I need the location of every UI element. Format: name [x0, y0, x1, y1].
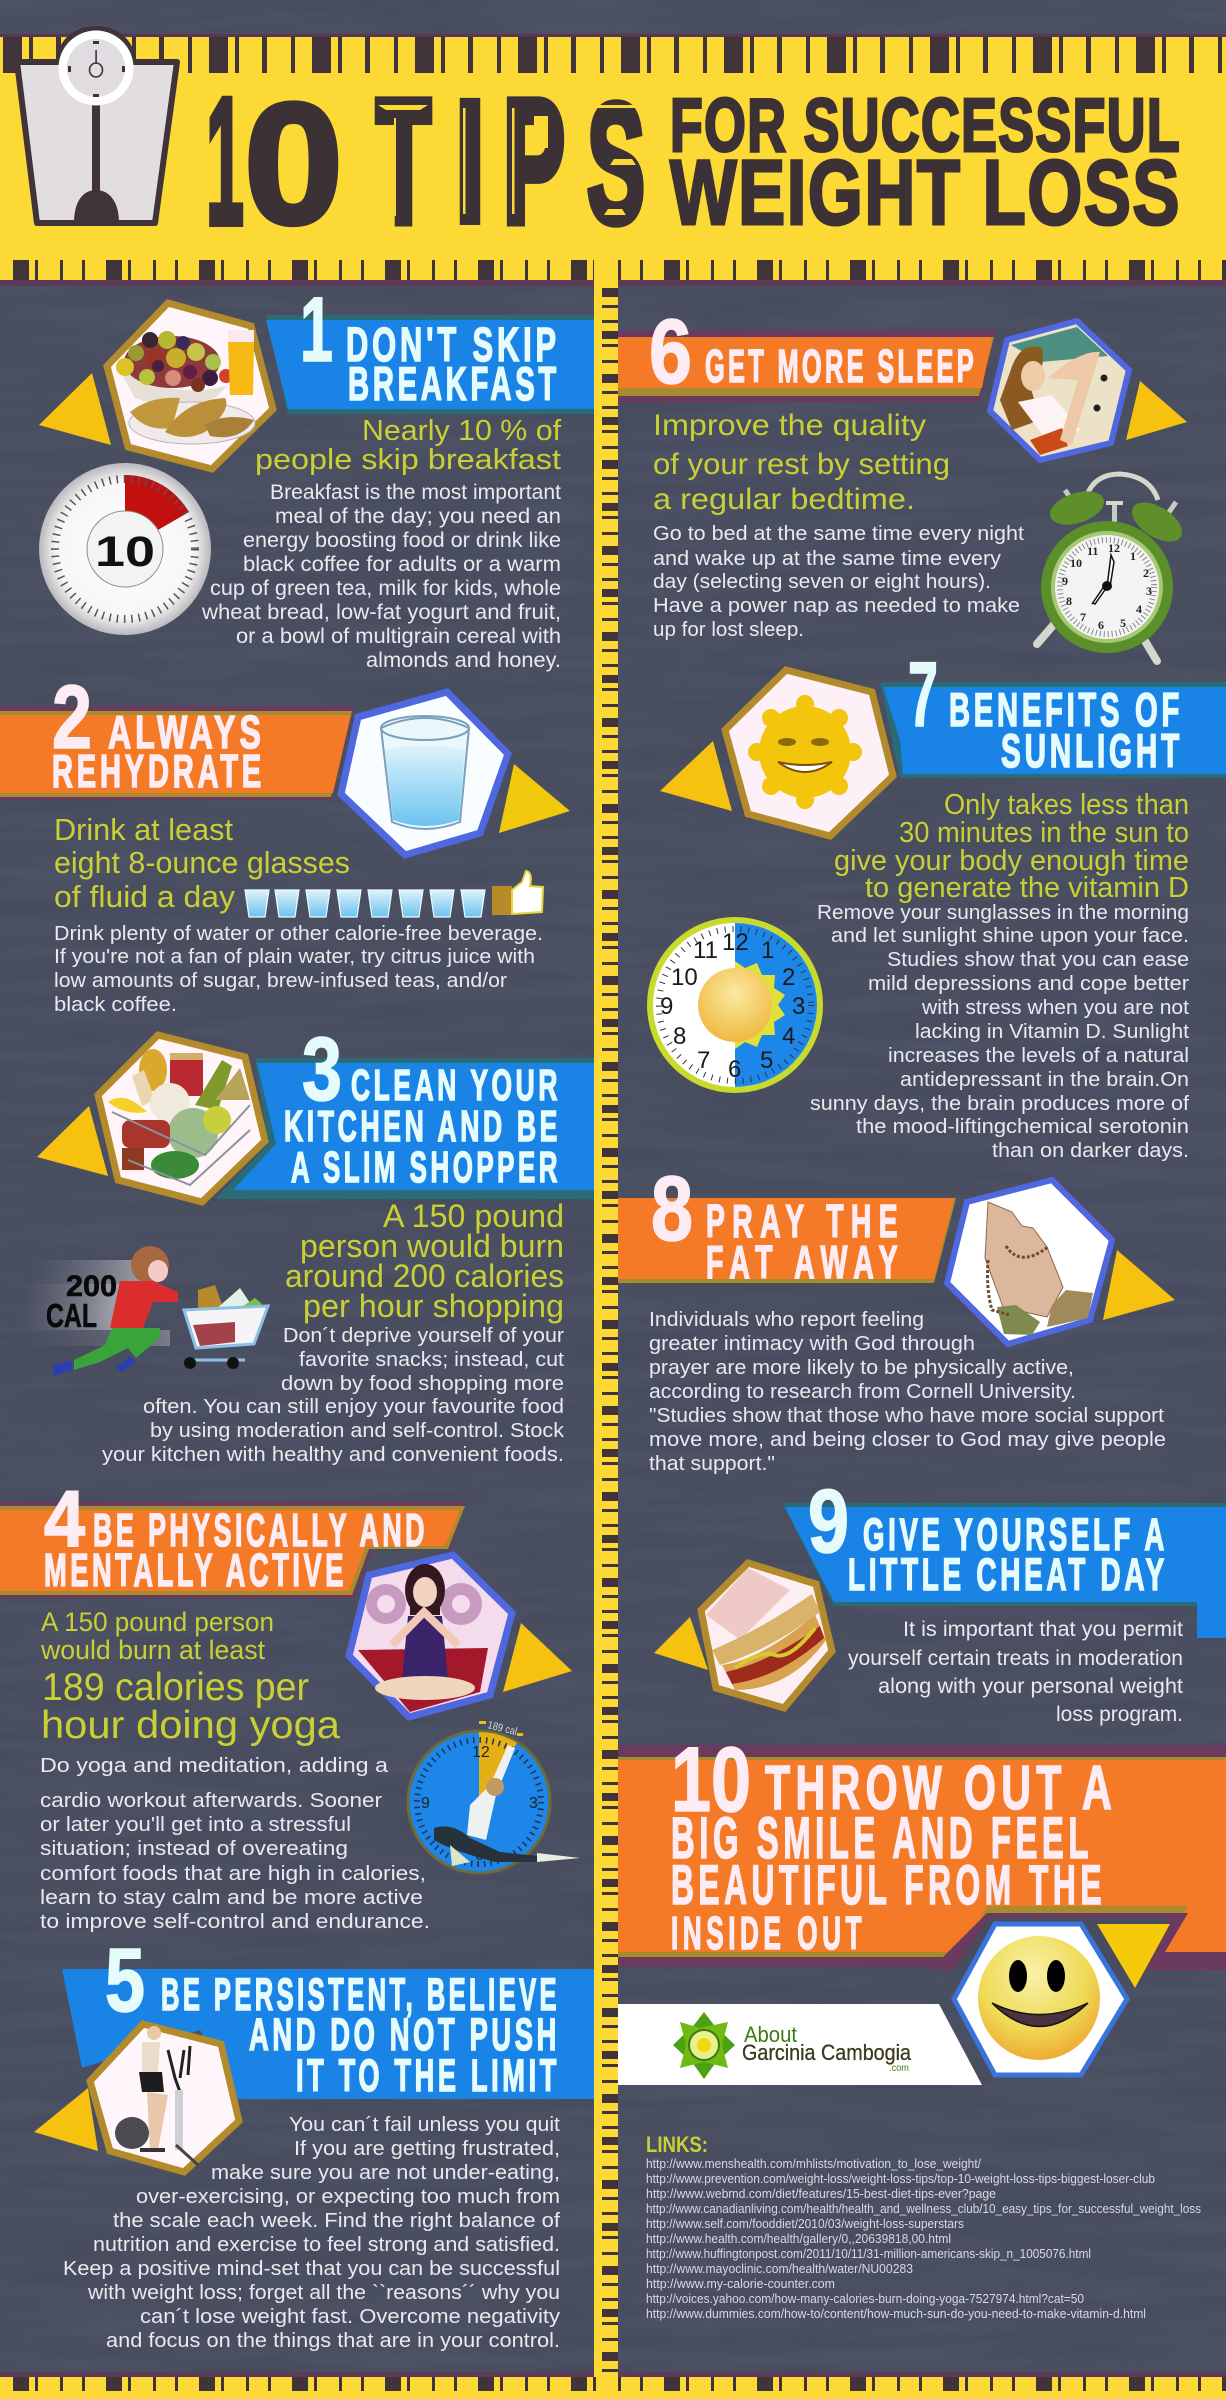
heading: AND DO NOT PUSH	[249, 2009, 560, 2060]
heading	[44, 1504, 428, 1596]
sun clock icon: 5	[760, 1047, 773, 1074]
body text: and let sunlight shine upon your face.	[831, 925, 1189, 947]
subheading: around 200 calories	[285, 1258, 564, 1294]
banner	[215, 1058, 594, 1199]
body text: Studies show that you can ease	[887, 949, 1189, 971]
yoga clock icon: 6	[475, 1847, 484, 1864]
body text: black coffee for adults or a warm	[243, 553, 561, 576]
heading: KITCHEN AND BE	[284, 1102, 561, 1151]
illustration: shopper with cart: CAL	[46, 1297, 97, 1334]
subheading: a regular bedtime.	[653, 483, 915, 516]
body text: or a bowl of multigrain cereal with	[236, 625, 561, 648]
subheading	[255, 415, 562, 476]
yoga clock icon	[408, 1719, 580, 1873]
banner	[62, 1969, 594, 2099]
banner	[618, 1198, 956, 1283]
heading	[848, 1509, 1168, 1600]
body text: along with your personal weight	[878, 1675, 1183, 1698]
body text: antidepressant in the brain.On	[900, 1069, 1189, 1091]
yoga clock icon: 9	[421, 1795, 430, 1812]
subheading: 189 calories per	[42, 1666, 309, 1709]
pointer triangle	[503, 1623, 572, 1692]
subheading: per hour shopping	[303, 1288, 564, 1324]
body text: your kitchen with healthy and convenient foods.	[102, 1444, 564, 1466]
body text: to improve self-control and endurance.	[40, 1911, 430, 1933]
heading: ALWAYS	[108, 706, 265, 758]
body text: increases the levels of a natural	[888, 1045, 1189, 1067]
footer ruler	[0, 2372, 1226, 2399]
link urls: http://www.self.com/fooddiet/2010/03/weight-loss-superstars	[646, 2217, 964, 2231]
subheading	[54, 812, 350, 914]
body text: Don´t deprive yourself of your	[283, 1325, 564, 1347]
brand text: .com	[889, 2063, 909, 2074]
body text: meal of the day; you need an	[275, 505, 561, 528]
link urls	[646, 2157, 1201, 2321]
number: 10	[671, 1729, 751, 1831]
subheading	[285, 1198, 564, 1324]
body text: It is important that you permit	[903, 1618, 1183, 1641]
illustration: shopper with cart	[20, 1246, 268, 1376]
number: 3	[302, 1020, 342, 1120]
body text: Individuals who report feeling	[649, 1309, 924, 1331]
subheading: A 150 pound	[383, 1198, 564, 1234]
body text: can´t lose weight fast. Overcome negativity	[140, 2306, 560, 2328]
title: TIPS	[376, 64, 645, 260]
logo tag: About Garcinia Cambogia	[618, 2004, 982, 2085]
subheading: to generate the vitamin D	[865, 872, 1189, 904]
body text	[63, 2114, 560, 2352]
alarm clock icon: 2	[1143, 566, 1149, 580]
number: 6	[649, 301, 692, 403]
body text: up for lost sleep.	[653, 619, 804, 641]
banner	[880, 682, 1226, 778]
body text: cup of green tea, milk for kids, whole	[210, 577, 561, 600]
body text	[810, 902, 1189, 1162]
heading: A SLIM SHOPPER	[291, 1143, 561, 1192]
heading: BREAKFAST	[348, 357, 560, 410]
panel: tip 2	[0, 668, 570, 1016]
alarm clock icon: 5	[1120, 616, 1126, 630]
alarm clock icon: 11	[1087, 544, 1098, 558]
hexagon: elliptical machine	[90, 2024, 239, 2172]
sun clock icon: 11	[693, 937, 718, 964]
title: TIPS: S	[587, 69, 645, 259]
link urls: http://www.prevention.com/weight-loss/weight-loss-tips/top-10-weight-loss-tips-biggest-loser-club	[646, 2172, 1155, 2186]
banner	[618, 1745, 1226, 1975]
heading: IT TO THE LIMIT	[296, 2050, 560, 2101]
heading	[671, 1754, 1117, 1959]
brand text	[742, 2022, 912, 2074]
panel: tip 6	[618, 301, 1189, 661]
hexagon: grocery basket	[98, 1035, 265, 1202]
link urls: http://www.huffingtonpost.com/2011/10/11/31-million-americans-skip_n_1005076.html	[646, 2247, 1091, 2261]
icon: bathroom scale	[17, 26, 177, 223]
hexagon: yoga	[349, 1555, 512, 1717]
pointer triangle	[660, 741, 732, 811]
alarm clock icon: 12	[1108, 541, 1120, 555]
banner	[782, 1503, 1226, 1638]
number: 7	[908, 644, 938, 746]
hexagon: water glass	[341, 692, 508, 855]
body text: Have a power nap as needed to make	[653, 595, 1020, 617]
body text: lacking in Vitamin D. Sunlight	[915, 1021, 1189, 1043]
pointer triangle	[34, 2088, 98, 2151]
body text: prayer are more likely to be physically active,	[649, 1357, 1074, 1379]
heading: GET MORE SLEEP	[705, 340, 977, 392]
body text: favorite snacks; instead, cut	[299, 1349, 564, 1371]
body text: learn to stay calm and be more active	[40, 1887, 423, 1909]
panel: tip 7	[650, 644, 1226, 1162]
pointer triangle	[39, 373, 111, 445]
body text: sunny days, the brain produces more of	[810, 1093, 1189, 1115]
body text: the scale each week. Find the right balance of	[113, 2210, 560, 2232]
body text: wheat bread, low-fat yogurt and fruit,	[201, 601, 561, 624]
link urls: http://www.mayoclinic.com/health/water/NU00283	[646, 2262, 913, 2276]
subheading: would burn at least	[40, 1635, 265, 1665]
hexagon: sleeping woman	[990, 321, 1129, 460]
body text: nutrition and exercise to feel strong and satisfied.	[93, 2234, 560, 2256]
alarm clock icon	[1037, 474, 1189, 661]
body text: cardio workout afterwards. Sooner	[40, 1790, 382, 1812]
body text: comfort foods that are high in calories,	[40, 1863, 426, 1885]
subheading: eight 8-ounce glasses	[54, 845, 350, 880]
body text: Breakfast is the most important	[270, 481, 561, 504]
panel: tip 3	[20, 1020, 594, 1466]
link urls: http://voices.yahoo.com/how-many-calories-burn-doing-yoga-7527974.html?cat=50	[646, 2292, 1084, 2306]
panel: tip 1	[39, 279, 594, 672]
body text: and wake up at the same time every	[653, 548, 1001, 570]
body text: often. You can still enjoy your favourite food	[143, 1396, 564, 1418]
subheading: A 150 pound person	[41, 1607, 274, 1637]
heading: DON'T SKIP	[346, 319, 560, 372]
heading: REHYDRATE	[52, 745, 265, 797]
panel: tip 4	[0, 1474, 580, 1933]
alarm clock icon: 6	[1098, 618, 1104, 632]
title: TIPS: P	[503, 64, 565, 260]
banner	[266, 315, 594, 414]
heading: PRAY THE	[706, 1195, 905, 1247]
body text: energy boosting food or drink like	[243, 529, 561, 552]
panel: tip 8	[618, 1158, 1175, 1475]
body text: over-exercising, or expecting too much from	[136, 2186, 560, 2208]
alarm clock icon: 7	[1080, 610, 1086, 624]
heading	[284, 1061, 561, 1192]
subheading: person would burn	[300, 1228, 564, 1264]
link urls: http://www.dummies.com/how-to/content/how-much-sun-do-you-need-to-make-vitamin-d.html	[646, 2307, 1146, 2321]
heading: INSIDE OUT	[671, 1907, 866, 1959]
heading	[52, 706, 265, 797]
body text: If you are getting frustrated,	[294, 2138, 560, 2160]
heading	[161, 1969, 560, 2101]
body text: situation; instead of overeating	[40, 1838, 348, 1860]
center ruler	[594, 260, 618, 2377]
body text: Remove your sunglasses in the morning	[817, 902, 1189, 924]
body text	[54, 923, 543, 1016]
yoga clock icon: 3	[529, 1795, 538, 1812]
body text: mild depressions and cope better	[868, 973, 1189, 995]
body text: and focus on the things that are in your control.	[106, 2330, 560, 2352]
timer icon	[39, 463, 211, 635]
link urls: http://www.webmd.com/diet/features/15-best-diet-tips-ever?page	[646, 2187, 996, 2201]
pointer triangle	[1126, 381, 1187, 440]
hexagon: smiley	[954, 1924, 1127, 2075]
body text: or later you'll get into a stressful	[40, 1814, 351, 1836]
banner	[618, 330, 996, 402]
links heading: LINKS:	[646, 2132, 708, 2157]
hexagon: smiling sun	[725, 670, 893, 836]
sun clock icon: 8	[673, 1023, 686, 1050]
heading: FAT AWAY	[706, 1236, 905, 1288]
body text	[40, 1755, 430, 1933]
link urls: http://www.canadianliving.com/health/health_and_wellness_club/10_easy_tips_for_successful_weight_loss	[646, 2202, 1201, 2216]
sun clock icon: 3	[792, 993, 805, 1020]
subheading: Only takes less than	[944, 789, 1189, 821]
body text: make sure you are not under-eating,	[211, 2162, 560, 2184]
subheading	[40, 1607, 340, 1747]
body text	[102, 1325, 565, 1466]
body text: that support."	[649, 1453, 775, 1475]
yoga clock icon: 189 cal	[486, 1719, 518, 1738]
body text: You can´t fail unless you quit	[289, 2114, 560, 2136]
sun clock icon: 7	[697, 1047, 710, 1074]
header band	[0, 26, 1226, 286]
sun clock icon: 12	[722, 929, 749, 956]
sun clock icon: 10	[671, 964, 698, 991]
link urls: http://www.menshealth.com/mhlists/motivation_to_lose_weight/	[646, 2157, 981, 2171]
icon: flower	[673, 2012, 735, 2079]
number: 5	[105, 1931, 145, 2031]
number: 9	[808, 1472, 849, 1572]
body text: Go to bed at the same time every night	[653, 523, 1024, 545]
body text: If you're not a fan of plain water, try citrus juice with	[54, 946, 535, 968]
sun clock icon: 9	[660, 993, 673, 1020]
body text	[848, 1618, 1183, 1726]
body text: day (selecting seven or eight hours).	[653, 571, 991, 593]
body text: Do yoga and meditation, adding a	[40, 1755, 389, 1777]
banner	[0, 706, 354, 800]
heading	[706, 1195, 905, 1288]
subheading	[834, 789, 1189, 904]
sun clock icon: 6	[728, 1056, 741, 1083]
pointer triangle	[1103, 1250, 1175, 1320]
subheading	[653, 409, 950, 516]
subheading: 30 minutes in the sun to	[899, 817, 1189, 849]
hexagon: breakfast photo	[107, 303, 273, 469]
pointer triangle	[654, 1617, 708, 1670]
sun clock icon	[650, 920, 820, 1090]
heading: BE PERSISTENT, BELIEVE	[161, 1969, 560, 2020]
title: 10: 1	[206, 59, 244, 263]
alarm clock icon: 9	[1062, 574, 1068, 588]
subheading: give your body enough time	[834, 845, 1189, 877]
heading	[949, 683, 1183, 777]
body text: Drink plenty of water or other calorie-free beverage.	[54, 923, 543, 945]
body text: with weight loss; forget all the ``reasons´´ why you	[87, 2282, 560, 2304]
number: 8	[651, 1158, 693, 1260]
body text: down by food shopping more	[281, 1373, 564, 1395]
sun clock icon: 1	[761, 937, 774, 964]
heading: MENTALLY ACTIVE	[44, 1544, 347, 1596]
heading	[346, 319, 560, 410]
pointer triangle	[1097, 1924, 1170, 1988]
body text: by using moderation and self-control. Stock	[150, 1420, 565, 1442]
number: 2	[52, 668, 92, 768]
timer icon: 10	[95, 528, 155, 576]
body text: according to research from Cornell University.	[649, 1381, 1076, 1403]
hexagon: hot dog	[701, 1563, 832, 1708]
body text: greater intimacy with God through	[649, 1333, 975, 1355]
subheading: hour doing yoga	[41, 1704, 340, 1747]
panel: tip 5	[34, 1931, 594, 2352]
number: 1	[300, 279, 333, 381]
panel: tip 10	[618, 1729, 1226, 2075]
body text: loss program.	[1056, 1703, 1183, 1726]
heading: CLEAN YOUR	[351, 1061, 561, 1110]
links list	[646, 2132, 1201, 2321]
yoga clock icon: 12	[472, 1744, 490, 1761]
title: TIPS: T	[376, 64, 431, 260]
body text: black coffee.	[54, 994, 177, 1016]
subheading: Improve the quality	[653, 409, 926, 442]
number: 4	[44, 1474, 85, 1563]
body text: than on darker days.	[992, 1140, 1189, 1162]
body text: the mood-liftingchemical serotonin	[856, 1116, 1189, 1138]
body text: yourself certain treats in moderation	[848, 1647, 1183, 1670]
body text	[653, 523, 1024, 641]
pointer triangle	[499, 764, 570, 833]
body text	[649, 1309, 1166, 1475]
sun clock icon: 4	[782, 1023, 795, 1050]
brand text: Garcinia Cambogia	[742, 2040, 912, 2065]
icon: thumbs up	[492, 871, 543, 915]
alarm clock icon: 1	[1130, 549, 1136, 563]
hexagon: praying hands	[947, 1180, 1112, 1344]
subheading: of your rest by setting	[653, 448, 950, 481]
banner	[0, 1502, 466, 1598]
alarm clock icon: 3	[1146, 584, 1152, 598]
title: 10: 0	[244, 68, 343, 260]
body text: almonds and honey.	[366, 649, 561, 672]
alarm clock icon: 8	[1066, 594, 1072, 608]
subheading: of fluid a day	[54, 879, 236, 914]
body text	[201, 481, 561, 672]
icon: eight glasses	[245, 890, 485, 917]
sun clock icon: 2	[782, 964, 795, 991]
panel: tip 9	[654, 1472, 1226, 1726]
subheading: Nearly 10 % of	[362, 415, 562, 447]
alarm clock icon: 10	[1070, 556, 1082, 570]
title: TIPS: I	[454, 64, 486, 260]
subheading: people skip breakfast	[255, 444, 561, 476]
brand text: About	[744, 2022, 797, 2047]
body text: "Studies show that those who have more social support	[649, 1405, 1164, 1427]
alarm clock icon: 4	[1136, 602, 1142, 616]
body text: with stress when you are not	[921, 997, 1189, 1019]
pointer triangle	[37, 1106, 108, 1176]
subheading: Drink at least	[54, 812, 233, 847]
body text: Keep a positive mind-set that you can be successful	[63, 2258, 560, 2280]
illustration: shopper with cart: 200	[66, 1270, 117, 1303]
heading: BE PHYSICALLY AND	[93, 1504, 428, 1556]
body text: move more, and being closer to God may give people	[649, 1429, 1166, 1451]
link urls: http://www.my-calorie-counter.com	[646, 2277, 835, 2291]
link urls: http://www.health.com/health/gallery/0,,20639818,00.html	[646, 2232, 951, 2246]
body text: low amounts of sugar, brew-infused teas, and/or	[54, 970, 507, 992]
